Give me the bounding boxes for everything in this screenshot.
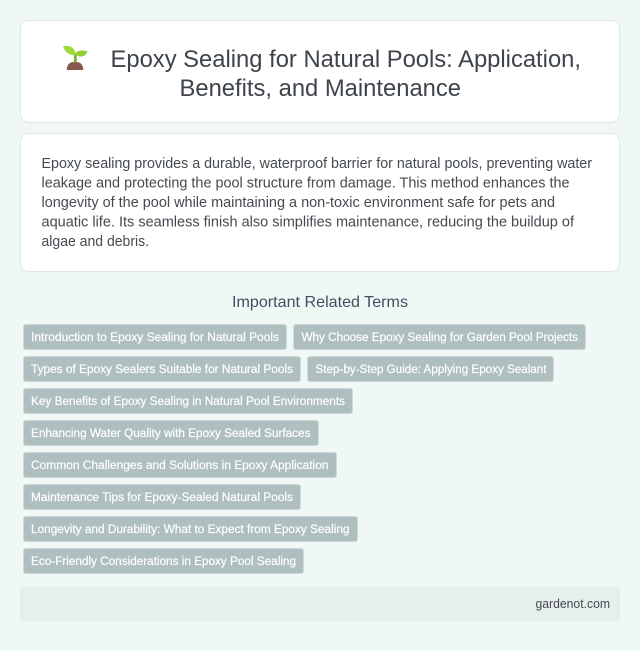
icon: seedling [63,46,88,70]
title: Benefits, and Maintenance [180,75,461,102]
text block: description: Epoxy sealing provides a durable, waterproof barrier for natural pools, preventing water [42,156,592,172]
tag [24,324,286,350]
tag: Maintenance Tips for Epoxy-Sealed Natural Pools [31,490,293,504]
tag [294,324,586,350]
heading: related terms: Important Related Terms [232,294,408,311]
tag: Eco-Friendly Considerations in Epoxy Pool Sealing [31,554,296,568]
panel: title card [20,20,620,122]
tag list [24,324,586,574]
tag [24,516,358,542]
tag: Enhancing Water Quality with Epoxy Sealed Surfaces [31,426,310,440]
text block: description [42,156,592,250]
tag: Why Choose Epoxy Sealing for Garden Pool Projects [302,330,578,344]
tag [24,356,300,382]
tag: Key Benefits of Epoxy Sealing in Natural Pool Environments [31,394,345,408]
tag [24,388,352,414]
tag [24,548,304,574]
tag [24,420,318,446]
tag: Step-by-Step Guide: Applying Epoxy Sealant [316,362,547,376]
text block: description: longevity of the pool while maintaining a non-toxic environment safe for pets and [42,195,555,211]
tag: Types of Epoxy Sealers Suitable for Natural Pools [31,362,293,376]
tag [308,356,554,382]
tag: Longevity and Durability: What to Expect from Epoxy Sealing [31,522,350,536]
tag [24,484,300,510]
text block: description: leakage and protecting the pool structure from damage. This method enhances the [42,176,570,192]
title: Epoxy Sealing for Natural Pools: Application, [110,46,581,73]
panel: description [20,134,620,272]
tag [24,452,336,478]
text block: description: algae and debris. [42,234,149,250]
tag: Introduction to Epoxy Sealing for Natural Pools [31,330,279,344]
footer text: gardenot.com [536,596,610,611]
title [110,46,581,102]
footer [20,587,620,621]
text block: description: aquatic life. Its seamless finish also simplifies maintenance, reducing the buildup of [42,214,575,230]
tag: Common Challenges and Solutions in Epoxy Application [31,458,328,472]
